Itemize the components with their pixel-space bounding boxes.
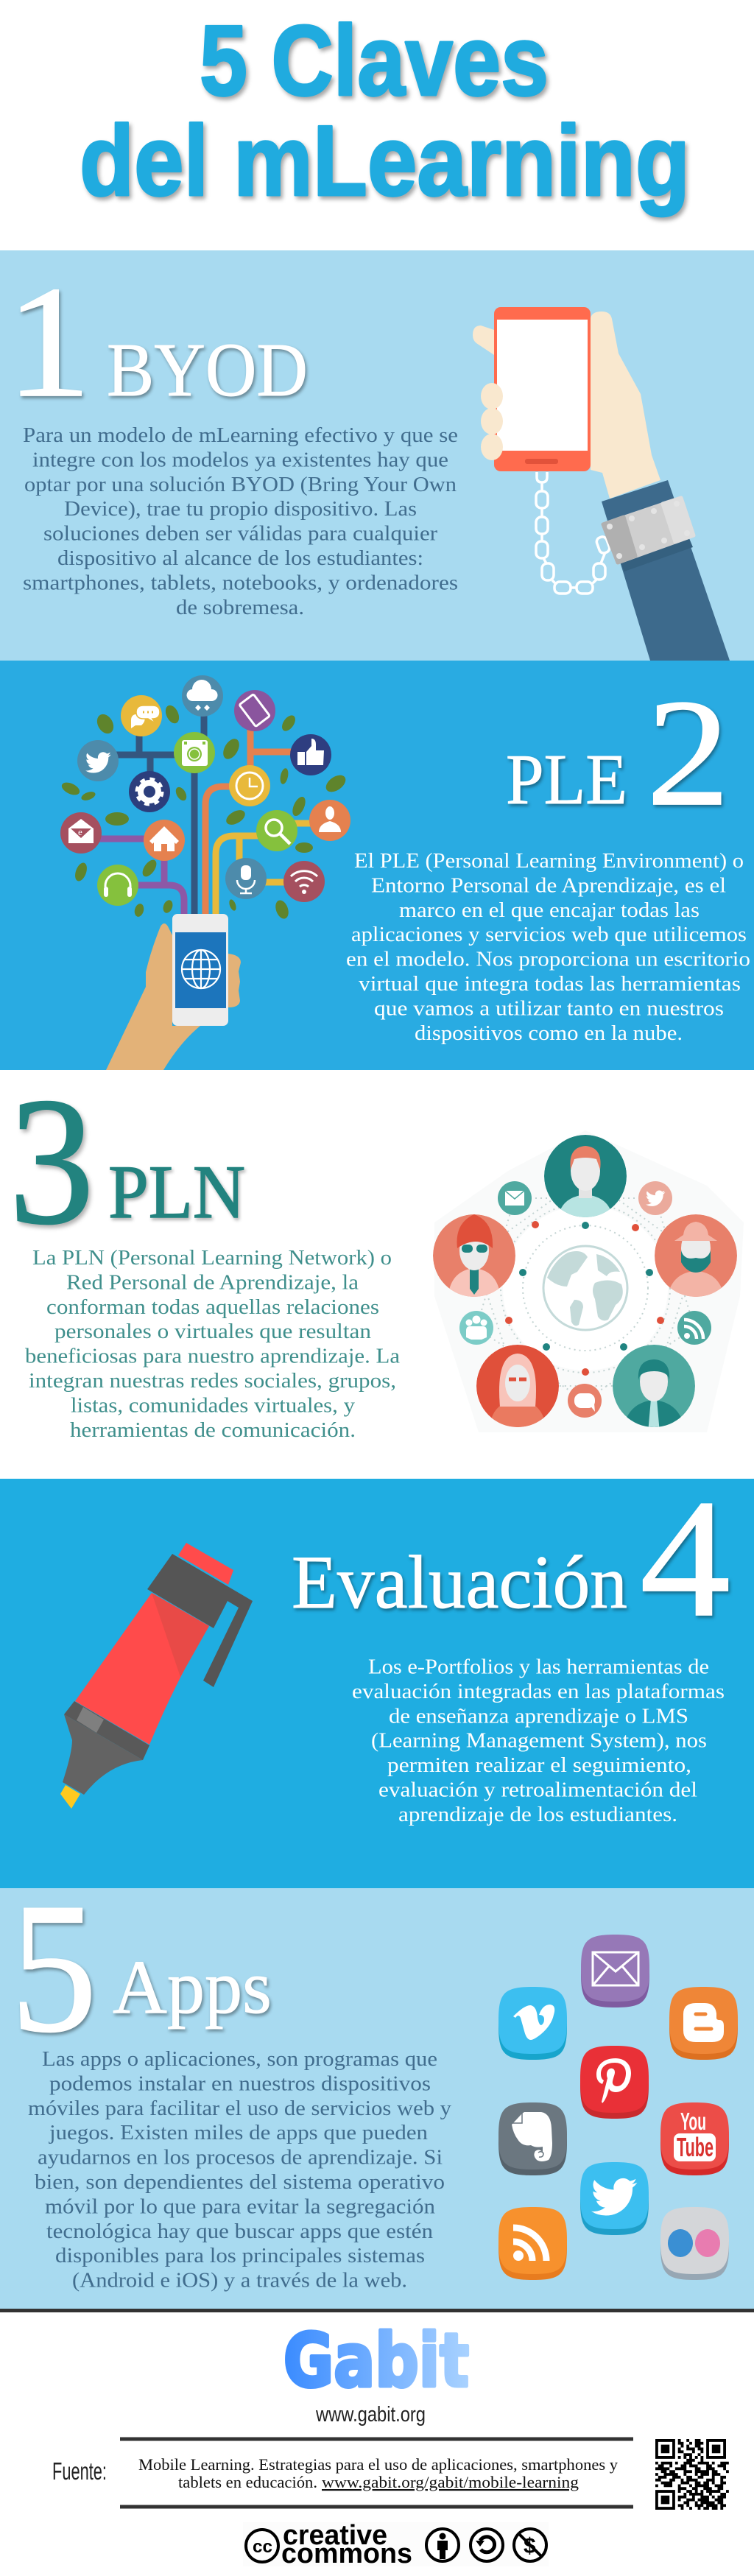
text block: PLE: Entorno Personal de Aprendizaje, es el <box>371 874 726 897</box>
text block: BYOD: Para un modelo de mLearning efectivo y que se <box>23 424 458 447</box>
icon: woman with glasses <box>476 1345 559 1432</box>
icon: home <box>144 820 185 861</box>
heading: PLN: PLN <box>108 1150 245 1234</box>
icon: community bubble <box>459 1311 493 1345</box>
icon: person <box>309 800 350 841</box>
icon: hand chained to phone <box>473 307 730 661</box>
text block: BYOD: smartphones, tablets, notebooks, y ordenadores <box>23 571 458 594</box>
heading: BYOD: BYOD <box>107 328 308 412</box>
cuff <box>603 498 694 563</box>
icon: pinterest app <box>580 2046 649 2119</box>
website url: www.gabit.org <box>315 2403 426 2427</box>
title <box>80 4 690 217</box>
logo: Gabit: Gabit <box>283 2318 469 2404</box>
text block: PLN <box>25 1247 401 1442</box>
icon: rss app <box>498 2207 567 2280</box>
number 5: 5 <box>10 1865 97 2071</box>
text block: Evaluación: permiten realizar el seguimiento, <box>387 1754 691 1777</box>
icon: twitter <box>77 740 119 781</box>
phone <box>494 307 591 471</box>
source citation <box>120 2439 633 2507</box>
text block: Apps: Las apps o aplicaciones, son programas que <box>42 2048 437 2071</box>
icon: search <box>256 810 297 851</box>
text block: BYOD: optar por una solución BYOD (Bring Your Own <box>24 474 457 496</box>
heading: Apps: Apps <box>113 1945 272 2030</box>
panel: Apps <box>0 1865 754 2309</box>
icon: youtube app <box>660 2102 729 2175</box>
QR code <box>655 2439 729 2510</box>
text block: Evaluación: evaluación y retroalimentación del <box>378 1779 697 1801</box>
icon: hand holding phone <box>106 914 241 1070</box>
icon: youtube app: Tube <box>677 2132 714 2162</box>
text block: BYOD: Device), trae tu propio dispositivo. Las <box>64 498 417 521</box>
heading: Evaluación: Evaluación <box>292 1541 627 1625</box>
title: 5 Claves <box>200 4 549 116</box>
icon: non commercial: $ <box>524 2534 536 2558</box>
source citation: tablets en educación. <box>178 2473 317 2491</box>
icon: people network around globe <box>433 1130 744 1433</box>
heading: PLE: PLE <box>506 740 627 819</box>
icon: vimeo app <box>498 1987 567 2060</box>
icon: mail app <box>581 1935 649 2007</box>
icon: cloud <box>182 675 223 717</box>
icon: person with sunglasses <box>433 1214 515 1303</box>
text block: Apps <box>28 2048 451 2292</box>
text block: PLN: conforman todas aquellas relaciones <box>46 1296 379 1319</box>
text block: PLN: listas, comunidades virtuales, y <box>71 1394 355 1417</box>
text block: BYOD: dispositivo al alcance de los estudiantes: <box>57 547 423 570</box>
icon: email <box>60 812 102 854</box>
text block: PLN: beneficiosas para nuestro aprendizaje. La <box>25 1345 401 1368</box>
text block: Apps: tecnológica hay que buscar apps que estén <box>46 2220 433 2243</box>
icon: app tree growing from phone <box>60 675 350 1070</box>
icon: evernote app <box>498 2102 567 2175</box>
icon: blogger app <box>669 1987 738 2060</box>
text block: PLE: dispositivos como en la nube. <box>415 1022 683 1045</box>
icon: rss bubble <box>677 1311 711 1345</box>
panel: Evaluación <box>0 1465 754 1888</box>
icon: microphone <box>225 858 267 899</box>
text block: PLE: marco en el que encajar todas las <box>399 899 700 922</box>
icon: thumbs up <box>290 734 331 775</box>
panel: BYOD <box>0 250 754 661</box>
icon: tablet <box>234 690 275 731</box>
license: creative commons: cc <box>253 2537 272 2557</box>
text block: Apps: juegos. Existen miles de apps que pueden <box>49 2122 428 2144</box>
panel: PLN <box>16 1100 737 1437</box>
text block: PLE: aplicaciones y servicios web que utilicemos <box>351 923 747 946</box>
icon: flickr app <box>660 2207 729 2280</box>
icon: wifi <box>283 861 325 902</box>
icon: gear <box>129 771 170 812</box>
text block: PLE <box>346 850 750 1045</box>
icon: chat <box>121 695 162 736</box>
icon: twitter bubble <box>638 1181 672 1215</box>
panel: PLE <box>0 661 754 1070</box>
icon: youtube app: You <box>680 2108 706 2135</box>
divider line <box>0 2309 754 2312</box>
icon: clock <box>229 765 270 806</box>
text block: PLN: integran nuestras redes sociales, grupos, <box>29 1370 396 1393</box>
icon: man with tie <box>613 1345 695 1433</box>
icon: email: e <box>78 826 82 837</box>
icon: chat bubble <box>568 1384 602 1418</box>
text block: Evaluación <box>352 1655 725 1826</box>
text block: PLN: personales o virtuales que resultan <box>54 1320 371 1343</box>
text block: Evaluación: aprendizaje de los estudiantes. <box>398 1803 677 1826</box>
license: creative commons <box>243 2520 549 2569</box>
license: creative commons: creative <box>283 2520 387 2551</box>
number 1: 1 <box>6 253 91 430</box>
text block: BYOD <box>23 424 458 619</box>
license: creative commons: commons <box>281 2538 412 2569</box>
text block: PLN: La PLN (Personal Learning Network) o <box>32 1247 392 1270</box>
number 3: 3 <box>9 1060 94 1262</box>
text block: Apps: bien, son dependientes del sistema operativo <box>35 2171 445 2194</box>
source citation: Mobile Learning. Estrategias para el uso de aplicaciones, smartphones y <box>138 2455 618 2474</box>
text block: Apps: móvil por lo que para evitar la segregación <box>45 2195 435 2218</box>
icon: bearded person with hat <box>655 1214 737 1303</box>
number 4: 4 <box>640 1465 730 1652</box>
panel: footer <box>52 2318 729 2569</box>
icon: globe <box>543 1246 627 1330</box>
text block: PLN: herramientas de comunicación. <box>70 1419 356 1442</box>
source citation: www.gabit.org/gabit/mobile-learning <box>322 2473 579 2491</box>
text block: Evaluación: (Learning Management System), nos <box>371 1730 707 1753</box>
text block: Apps: podemos instalar en nuestros dispositivos <box>49 2072 431 2095</box>
text block: Evaluación: evaluación integradas en las plataformas <box>352 1681 725 1703</box>
text block: Apps: móviles para facilitar el uso de servicios web y <box>28 2097 451 2120</box>
text block: PLE: El PLE (Personal Learning Environment) o <box>354 850 744 873</box>
text block: PLN: Red Personal de Aprendizaje, la <box>66 1271 359 1294</box>
icon: person with teal background <box>544 1135 627 1222</box>
text block: BYOD: soluciones deben ser válidas para cualquier <box>43 523 438 546</box>
number 2: 2 <box>646 668 730 837</box>
icon: camera <box>174 732 215 773</box>
text block: Apps: ayudarnos en los procesos de aprendizaje. Si <box>38 2147 443 2169</box>
source label: Fuente: <box>52 2457 107 2485</box>
text block: Evaluación: de enseñanza aprendizaje o LMS <box>389 1705 688 1728</box>
icon: twitter app <box>580 2162 649 2235</box>
text block: Evaluación: Los e-Portfolios y las herramientas de <box>368 1655 709 1679</box>
icon: share alike <box>471 2529 503 2561</box>
text block: PLE: virtual que integra todas las herramientas <box>359 973 741 996</box>
title: del mLearning <box>80 105 690 217</box>
icon: mail bubble <box>498 1181 532 1215</box>
text block: BYOD: integre con los modelos ya existentes hay que <box>32 448 448 471</box>
chain <box>536 472 610 594</box>
icon: headphones <box>97 865 138 906</box>
icon: attribution <box>426 2529 459 2561</box>
text block: PLE: que vamos a utilizar tanto en nuestros <box>374 997 724 1020</box>
icon: non commercial <box>514 2529 546 2561</box>
text block: Apps: disponibles para los principales sistemas <box>55 2245 425 2267</box>
text block: BYOD: de sobremesa. <box>176 597 304 619</box>
text block: Apps: (Android e iOS) y a través de la web. <box>72 2270 407 2292</box>
text block: PLE: en el modelo. Nos proporciona un escritorio <box>346 949 750 971</box>
icon: highlighter marker <box>60 1543 253 1809</box>
